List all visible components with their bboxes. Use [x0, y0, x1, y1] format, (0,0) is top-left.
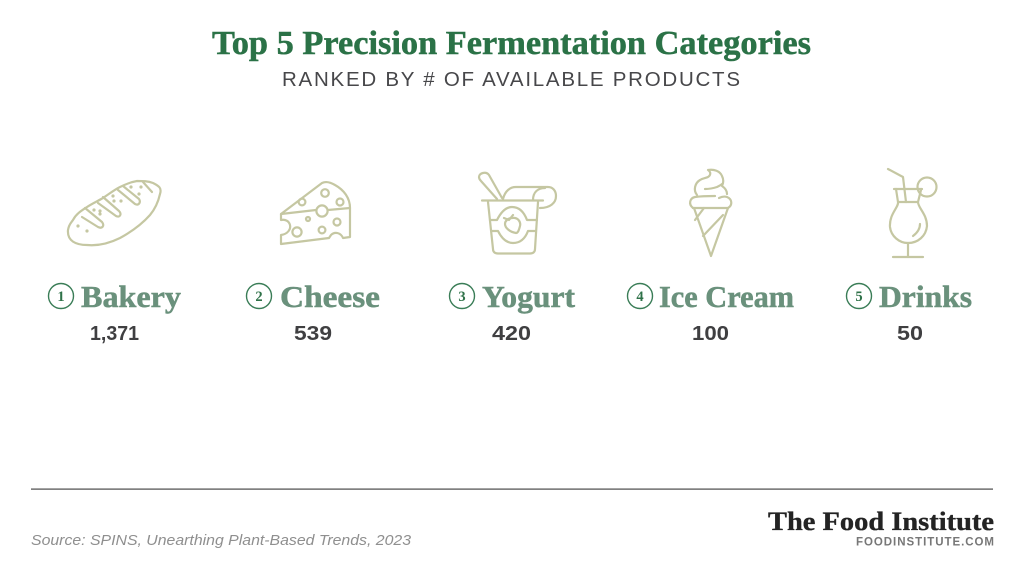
value: 420: 420: [492, 323, 531, 345]
logo: The Food Institute: The Food Institute: [768, 507, 994, 536]
category: cheese: [246, 182, 380, 345]
icon: bread: [68, 181, 161, 245]
category: bakery: [48, 181, 182, 345]
value: 100: 100: [692, 323, 729, 345]
logo: The Food Institute: FOODINSTITUTE.COM: [856, 536, 994, 548]
rank badge 4: [628, 284, 652, 308]
icon: yogurt cup: [479, 173, 556, 254]
rank badge 2: 2: [255, 289, 263, 305]
value: 539: 539: [294, 323, 332, 345]
category: yogurt: [450, 173, 576, 345]
rank badge 1: 1: [57, 289, 65, 305]
label: Ice Cream: Ice Cream: [659, 279, 794, 314]
category: ice cream: [628, 170, 794, 345]
rank badge 5: 5: [855, 289, 863, 305]
icon: cheese: [281, 182, 350, 244]
category: drinks: [846, 169, 972, 345]
value: 50: 50: [897, 323, 923, 345]
rank badge 3: [450, 284, 474, 308]
rank badge 3: 3: [458, 289, 466, 305]
subtitle: RANKED BY # OF AVAILABLE PRODUCTS: [282, 68, 740, 91]
icon: cocktail glass: [888, 169, 936, 257]
label: Yogurt: Yogurt: [482, 279, 576, 314]
label: Bakery: Bakery: [81, 279, 182, 314]
icon: ice cream cone: [690, 170, 731, 256]
rank badge 1: [48, 284, 74, 308]
logo: The Food Institute: [768, 507, 994, 548]
source note: Source: SPINS, Unearthing Plant-Based Trends, 2023: [31, 532, 412, 549]
title: Top 5 Precision Fermentation Categories: [212, 25, 811, 62]
rank badge 2: [246, 284, 272, 308]
rank badge 4: 4: [636, 289, 644, 305]
rank badge 5: [846, 284, 872, 308]
label: Drinks: Drinks: [879, 279, 972, 314]
label: Cheese: Cheese: [280, 279, 380, 314]
value: 1,371: 1,371: [90, 323, 139, 345]
